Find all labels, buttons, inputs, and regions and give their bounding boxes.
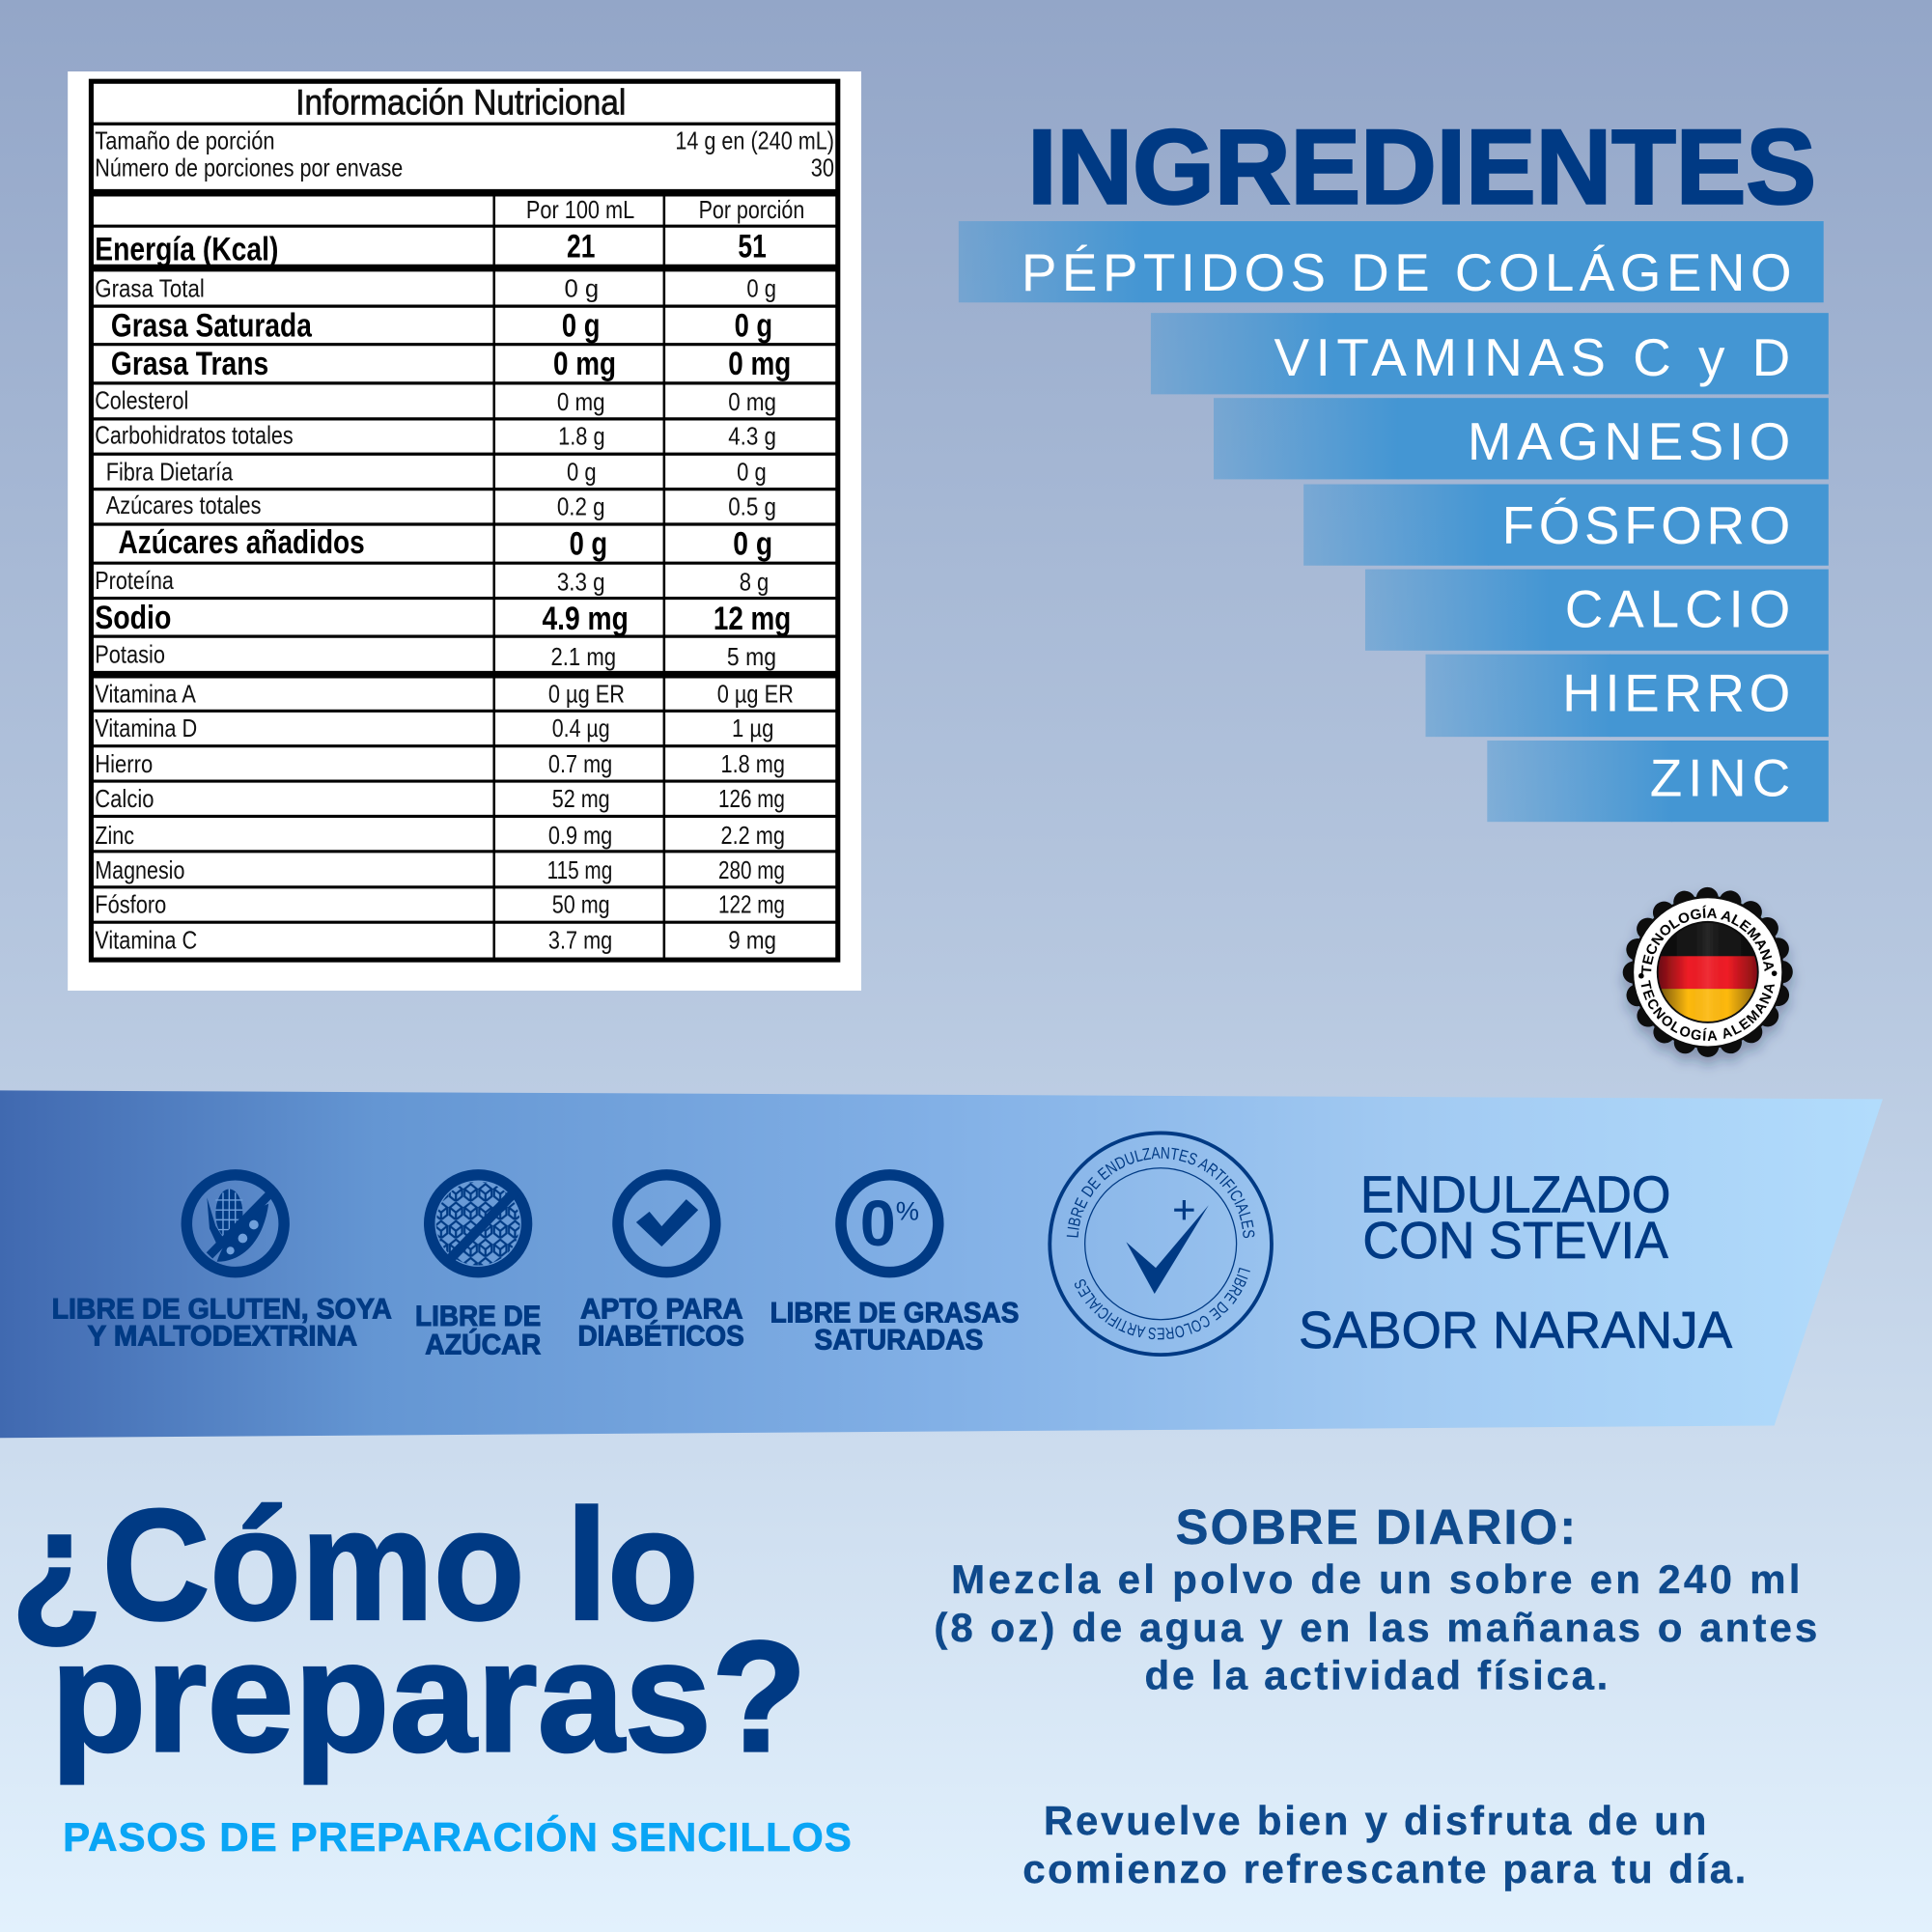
row: fibra: Fibra Dietaría xyxy=(106,458,234,487)
row: proteina xyxy=(95,566,769,596)
label: SATURADAS xyxy=(815,1324,983,1356)
ingredient: calcio: CALCIO xyxy=(1565,579,1790,639)
row: vitamina a: 0 µg ER xyxy=(717,679,794,708)
instruction lines: (8 oz) de agua y en las mañanas o antes xyxy=(934,1605,1817,1650)
row: grasa trans: Grasa Trans xyxy=(111,346,268,382)
ingredient: peptidos: PÉPTIDOS DE COLÁGENO xyxy=(1022,242,1792,302)
row: azucares totales: 0.5 g xyxy=(728,491,776,520)
ingredient: vitaminas xyxy=(1151,313,1829,394)
heading: ingredientes: INGREDIENTES xyxy=(1027,109,1816,227)
ingredient: fosforo: FÓSFORO xyxy=(1502,495,1790,555)
text block: revuelve: comienzo refrescante para tu día. xyxy=(1022,1846,1746,1891)
benefit: libre de gluten xyxy=(52,1175,392,1353)
text block: revuelve xyxy=(1022,1798,1746,1891)
row: vitamina c: Vitamina C xyxy=(95,926,197,955)
row: fibra: 0 g xyxy=(737,458,767,487)
label: AZÚCAR xyxy=(425,1328,541,1360)
row: energia: 51 xyxy=(738,229,767,266)
ingredient: hierro xyxy=(1426,655,1829,737)
heading: sobre diario: SOBRE DIARIO: xyxy=(1175,1499,1576,1554)
label: LIBRE DE xyxy=(415,1301,541,1332)
row: potasio xyxy=(95,640,776,671)
row: zinc: 0.9 mg xyxy=(548,821,612,850)
row: carbohidratos xyxy=(95,420,776,451)
row: carbohidratos: 1.8 g xyxy=(558,422,605,451)
row: magnesio: Magnesio xyxy=(95,855,184,884)
serving info xyxy=(95,126,834,182)
icon: sugar crystals crossed out xyxy=(430,1175,527,1273)
icon: corn and soy crossed out xyxy=(186,1175,284,1273)
row: grasa saturada xyxy=(111,307,772,344)
row: calcio xyxy=(95,784,785,813)
row: vitamina c: 3.7 mg xyxy=(548,926,612,955)
row: carbohidratos: Carbohidratos totales xyxy=(95,420,294,449)
row: vitamina d xyxy=(95,714,773,742)
row: magnesio: 115 mg xyxy=(547,855,612,884)
row: vitamina a xyxy=(95,679,794,708)
instruction lines: de la actividad física. xyxy=(1145,1653,1608,1698)
row: grasa saturada: 0 g xyxy=(735,307,772,344)
ingredient: vitaminas: VITAMINAS C y D xyxy=(1274,327,1790,387)
row: azucares anadidos: Azúcares añadidos xyxy=(119,524,365,561)
benefit: libre de grasas xyxy=(770,1175,1019,1356)
row: energia: Energía (Kcal) xyxy=(95,231,278,267)
row: grasa trans: 0 mg xyxy=(728,346,791,382)
row: azucares totales: 0.2 g xyxy=(557,491,605,520)
text: endulzado con stevia xyxy=(1360,1166,1670,1270)
column headers xyxy=(526,195,804,224)
row: energia: 21 xyxy=(567,229,595,266)
badge text: TECNOLOGÍA ALEMANA xyxy=(1641,980,1775,1041)
row: vitamina d: 1 µg xyxy=(732,714,773,742)
row: calcio: Calcio xyxy=(95,784,154,813)
text block: sobre diario xyxy=(934,1499,1817,1698)
row: hierro: 0.7 mg xyxy=(548,749,612,778)
column headers: Por porción xyxy=(699,195,804,224)
row: energia xyxy=(95,229,767,267)
text block: revuelve: Revuelve bien y disfruta de un xyxy=(1044,1798,1706,1843)
serving info: Tamaño de porción xyxy=(95,126,275,154)
row: colesterol: Colesterol xyxy=(95,386,188,415)
table grid xyxy=(91,81,838,960)
heading: como lo preparas xyxy=(11,1476,807,1784)
row: hierro: 1.8 mg xyxy=(721,749,785,778)
panel: nutrition facts xyxy=(68,71,861,991)
row: fosforo xyxy=(95,890,785,919)
row: vitamina a: 0 µg ER xyxy=(548,679,625,708)
row: vitamina d: Vitamina D xyxy=(95,714,197,742)
row: azucares totales xyxy=(106,490,776,520)
text: endulzado con stevia: ENDULZADO xyxy=(1360,1166,1670,1224)
heading: como lo preparas: ¿Cómo lo xyxy=(11,1476,699,1653)
ingredient: magnesio: MAGNESIO xyxy=(1468,411,1790,471)
label: LIBRE DE GRASAS xyxy=(770,1297,1019,1329)
heading: como lo preparas: preparas? xyxy=(50,1608,807,1784)
row: grasa total: Grasa Total xyxy=(95,274,205,303)
row: calcio: 52 mg xyxy=(552,784,610,813)
icon: zero percent: 0 xyxy=(860,1189,896,1260)
row: sodio xyxy=(95,600,791,637)
label: LIBRE DE GLUTEN, SOYA xyxy=(52,1293,392,1325)
row: grasa total xyxy=(95,274,776,303)
ingredient: zinc xyxy=(1487,741,1829,822)
row: grasa saturada: 0 g xyxy=(562,307,600,344)
badge text: TECNOLOGÍA ALEMANA xyxy=(1641,906,1775,973)
row: magnesio xyxy=(95,855,785,884)
row: grasa total: 0 g xyxy=(746,274,776,303)
row: sodio: Sodio xyxy=(95,600,171,636)
column headers: Por 100 mL xyxy=(526,195,634,224)
row: fibra: 0 g xyxy=(567,458,597,487)
row: grasa saturada: Grasa Saturada xyxy=(111,307,313,344)
row: grasa trans xyxy=(111,346,791,382)
ingredient: fosforo xyxy=(1303,485,1829,566)
instruction lines: Mezcla el polvo de un sobre en 240 ml xyxy=(951,1556,1800,1602)
row: fibra xyxy=(106,458,767,487)
table title: Información Nutricional xyxy=(295,83,626,123)
benefit: libre de azucar xyxy=(415,1175,541,1360)
icon: check xyxy=(618,1175,715,1273)
subheading: pasos: PASOS DE PREPARACIÓN SENCILLOS xyxy=(63,1813,852,1860)
stamp text lower: LIBRE DE COLORES ARTIFICIALES xyxy=(1075,1267,1250,1340)
badge: tecnologia alemana xyxy=(1617,886,1799,1070)
row: colesterol: 0 mg xyxy=(728,387,776,416)
row: vitamina a: Vitamina A xyxy=(95,679,196,708)
text: endulzado con stevia: CON STEVIA xyxy=(1362,1212,1668,1270)
row: zinc: Zinc xyxy=(95,821,134,850)
instruction lines xyxy=(934,1556,1817,1698)
text: sabor naranja: SABOR NARANJA xyxy=(1299,1302,1733,1359)
icon: zero percent xyxy=(841,1175,938,1273)
row: carbohidratos: 4.3 g xyxy=(728,422,776,451)
row: grasa total: 0 g xyxy=(564,274,599,303)
row: magnesio: 280 mg xyxy=(718,855,785,884)
row: fosforo: Fósforo xyxy=(95,890,166,919)
row: azucares anadidos: 0 g xyxy=(570,525,607,562)
check mark xyxy=(1126,1205,1209,1294)
ingredient: peptidos xyxy=(959,221,1824,302)
row: proteina: 8 g xyxy=(740,567,769,596)
plus sign xyxy=(1174,1200,1194,1219)
ingredient: hierro: HIERRO xyxy=(1562,662,1790,722)
row: potasio: 2.1 mg xyxy=(550,642,616,671)
panel: benefits ribbon xyxy=(0,1090,1883,1439)
row: zinc: 2.2 mg xyxy=(721,821,785,850)
label xyxy=(52,1293,392,1353)
row: fosforo: 50 mg xyxy=(552,890,610,919)
serving info: Número de porciones por envase xyxy=(95,153,403,182)
serving info: 30 xyxy=(811,153,834,182)
label xyxy=(415,1301,541,1360)
benefit: apto para diabeticos xyxy=(578,1175,744,1353)
row: potasio: 5 mg xyxy=(727,642,776,671)
label: DIABÉTICOS xyxy=(578,1320,744,1353)
german flag xyxy=(1659,923,1757,1022)
row: potasio: Potasio xyxy=(95,640,165,669)
ingredient: zinc: ZINC xyxy=(1650,747,1790,807)
badge text xyxy=(1638,906,1777,1041)
serving info: 14 g en (240 mL) xyxy=(675,126,834,154)
row: zinc xyxy=(95,821,785,850)
row: vitamina d: 0.4 µg xyxy=(552,714,610,742)
row: azucares totales: Azúcares totales xyxy=(106,490,262,519)
row: proteina: 3.3 g xyxy=(557,567,605,596)
ingredient: calcio xyxy=(1365,570,1829,651)
row: azucares anadidos: 0 g xyxy=(733,525,772,562)
stamp text upper: LIBRE DE ENDULZANTES ARTIFICIALES xyxy=(1066,1147,1255,1238)
row: vitamina c: 9 mg xyxy=(728,926,776,955)
row: sodio: 4.9 mg xyxy=(543,601,629,637)
row: hierro xyxy=(95,749,785,778)
label: Y MALTODEXTRINA xyxy=(88,1321,357,1353)
white card xyxy=(68,71,861,991)
label xyxy=(578,1293,744,1353)
row: proteina: Proteína xyxy=(95,566,174,595)
row: calcio: 126 mg xyxy=(718,784,785,813)
row: sodio: 12 mg xyxy=(714,601,791,637)
label xyxy=(770,1297,1019,1356)
row: colesterol: 0 mg xyxy=(557,387,605,416)
ingredient: magnesio xyxy=(1214,398,1829,479)
row: vitamina c xyxy=(95,926,776,955)
panel: ingredient list xyxy=(959,221,1829,822)
row: azucares anadidos xyxy=(119,524,772,562)
row: colesterol xyxy=(95,386,776,416)
icon: zero percent: % xyxy=(896,1196,919,1225)
row: grasa trans: 0 mg xyxy=(553,346,616,382)
row: hierro: Hierro xyxy=(95,749,153,778)
stamp: libre de endulzantes artificiales xyxy=(1048,1132,1274,1357)
row: fosforo: 122 mg xyxy=(718,890,785,919)
label: APTO PARA xyxy=(580,1293,743,1325)
